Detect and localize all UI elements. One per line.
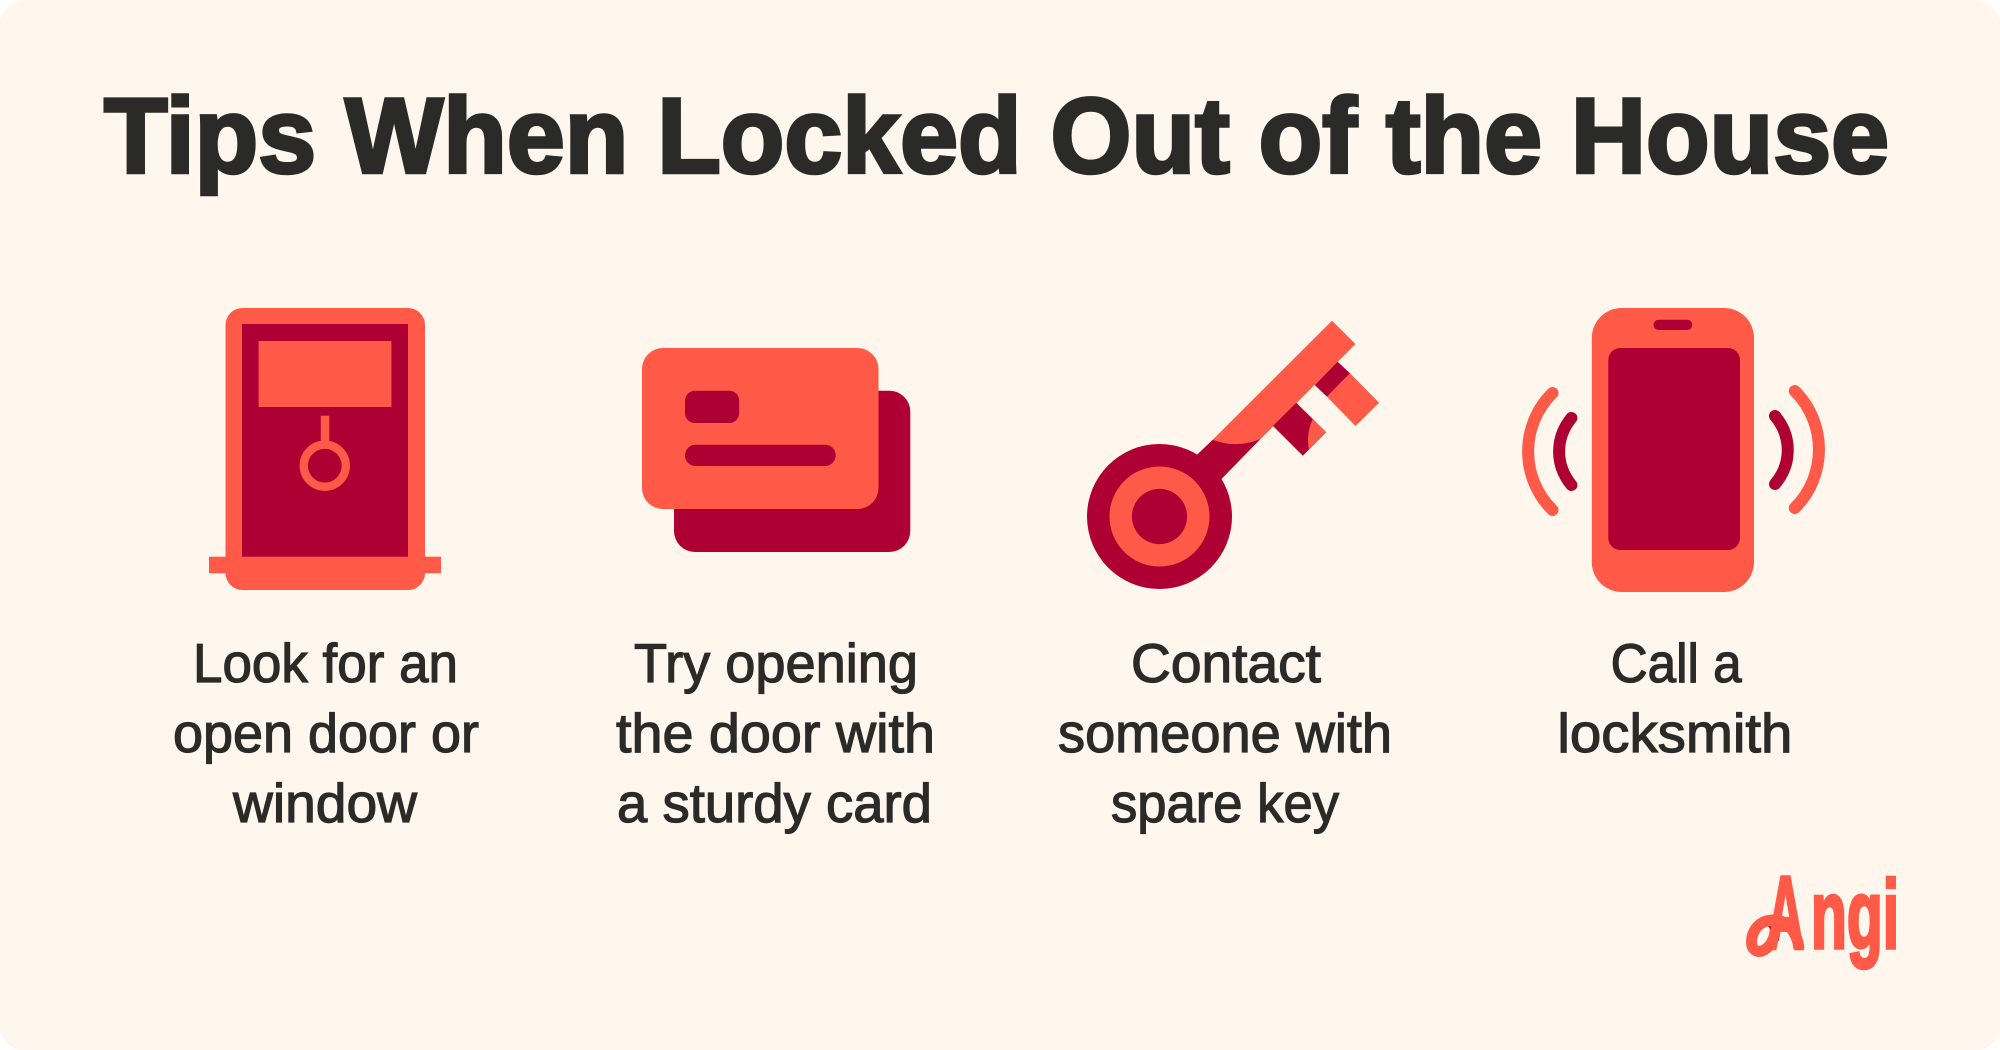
caption: sturdy card	[616, 632, 935, 834]
caption: spare key: Contact	[1131, 632, 1321, 694]
caption: spare key: someone with	[1058, 702, 1392, 764]
caption: sturdy card: Try opening	[634, 632, 918, 694]
logo: Angi: ngi	[1811, 860, 1899, 969]
caption: locksmith: locksmith	[1557, 702, 1792, 764]
caption: open door or window: open door or	[173, 702, 479, 764]
icon: cards	[642, 348, 910, 552]
icon: ringing phone	[1528, 308, 1819, 592]
caption: sturdy card: the door with	[616, 702, 935, 764]
title: Tips When Locked Out of the House	[104, 76, 1889, 196]
caption: open door or window	[173, 632, 479, 834]
caption: locksmith: Call a	[1611, 632, 1742, 694]
caption: open door or window: Look for an	[193, 632, 458, 694]
logo: Angi: A	[1767, 855, 1804, 970]
icon: key	[1087, 321, 1379, 589]
caption: open door or window: window	[232, 772, 417, 834]
caption: spare key	[1058, 632, 1392, 834]
icon: door	[209, 308, 441, 590]
caption: locksmith	[1557, 632, 1792, 764]
logo: Angi	[1752, 855, 1899, 970]
caption: sturdy card: a sturdy card	[617, 772, 932, 834]
caption: spare key: spare key	[1111, 772, 1339, 834]
